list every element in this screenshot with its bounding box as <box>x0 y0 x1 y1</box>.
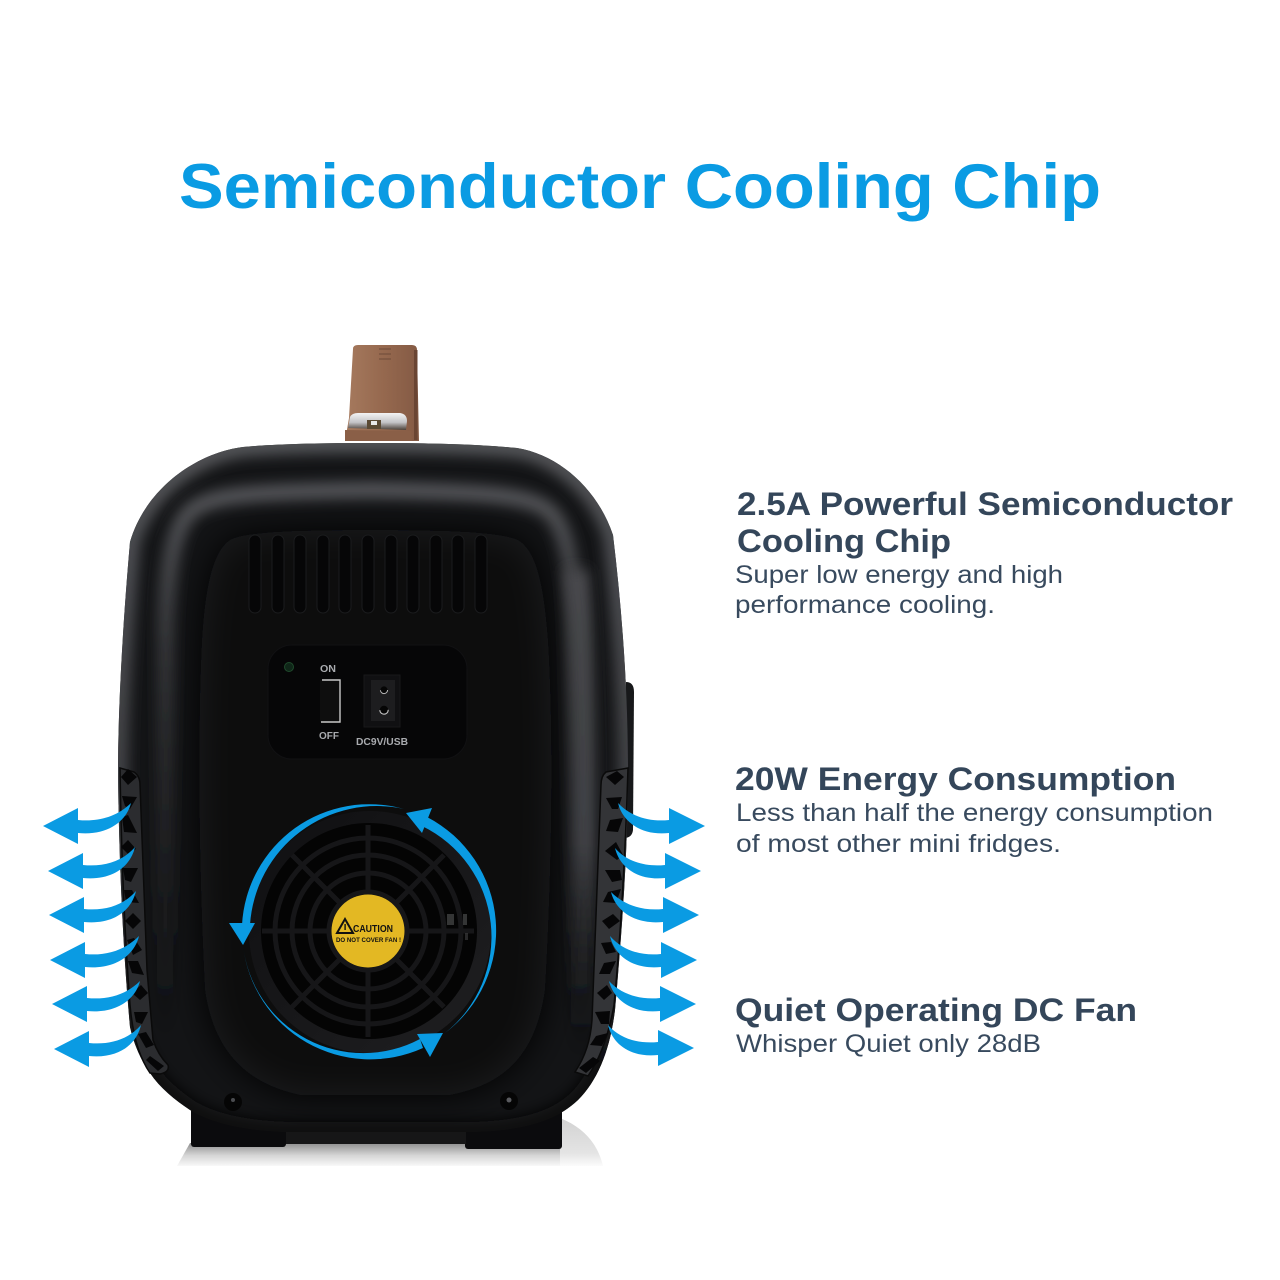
fan rim <box>249 811 491 1053</box>
feature description: of most other mini fridges. <box>736 830 1061 858</box>
fan <box>249 811 491 1053</box>
floor shadow <box>177 1118 603 1166</box>
DC socket <box>364 675 400 727</box>
title: Semiconductor Cooling Chip <box>179 152 1101 222</box>
metal buckle <box>348 413 407 430</box>
caution sticker: DO NOT COVER FAN ! <box>336 937 401 944</box>
rotation arrows around fan <box>229 804 496 1059</box>
feature description: Super low energy and high <box>735 561 1063 589</box>
feature description: performance cooling. <box>735 591 995 619</box>
ventilation slots <box>249 535 487 613</box>
feature heading: 2.5A Powerful Semiconductor <box>737 486 1233 522</box>
power LED <box>284 662 294 672</box>
rocker switch <box>320 680 340 722</box>
feature description <box>736 799 1213 858</box>
feature heading: Quiet Operating DC Fan <box>735 992 1137 1028</box>
left vent strip <box>120 768 168 1074</box>
right airflow arrows <box>608 803 705 1066</box>
feature description <box>735 561 1063 619</box>
feature heading: Cooling Chip <box>737 523 951 559</box>
feature: energy consumption <box>735 761 1213 858</box>
screws <box>224 1092 518 1111</box>
OFF label: OFF <box>319 731 339 742</box>
infographic canvas <box>43 162 1232 1166</box>
feet <box>191 1105 562 1149</box>
fan blade glints <box>447 914 468 940</box>
product: mini fridge back view <box>100 345 650 1166</box>
feature description: Less than half the energy consumption <box>736 799 1213 827</box>
control panel <box>268 645 467 759</box>
feature heading: 20W Energy Consumption <box>735 761 1176 797</box>
caution sticker: CAUTION <box>353 924 393 935</box>
caution sticker <box>332 894 404 968</box>
fan grille <box>262 825 474 1037</box>
side bump <box>624 682 634 838</box>
DC label: DC9V/USB <box>356 737 408 748</box>
fridge body shell <box>118 443 628 1125</box>
feature description: Whisper Quiet only 28dB <box>736 1030 1041 1058</box>
left airflow arrows <box>43 803 141 1067</box>
feature: cooling chip <box>735 486 1233 619</box>
feature heading <box>737 486 1233 559</box>
feature: quiet fan <box>735 992 1137 1058</box>
ON label: ON <box>320 664 336 675</box>
right vent strip <box>575 768 628 1076</box>
leather handle strap <box>345 345 419 441</box>
